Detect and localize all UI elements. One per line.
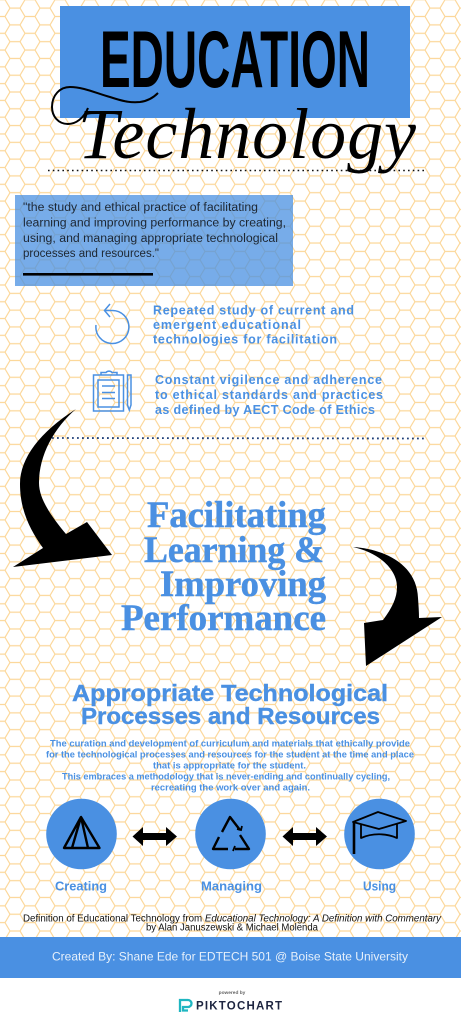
logo mark [180, 1000, 192, 1012]
dotted divider middle [52, 437, 425, 440]
text block: ethical standards: to ethical standards and practices [155, 388, 383, 402]
arrow: double managing to using [282, 827, 327, 846]
powered by Piktochart logo: powered by [219, 990, 246, 996]
paragraph: curation and development: The curation and development of curriculum and materials that ethically provide [50, 738, 410, 750]
heading: facilitating learning and improving performance [121, 495, 326, 639]
arrow: double creating to managing [132, 827, 177, 846]
quote text [23, 202, 286, 260]
heading: facilitating learning and improving performance: Learning & [144, 530, 324, 571]
quote text: "the study and ethical practice of facilitating [23, 202, 258, 214]
heading: appropriate technological processes and resources: Appropriate Technological [72, 680, 388, 706]
footer credit: Created By: Shane Ede for EDTECH 501 @ Boise State University [52, 950, 408, 964]
text block: repeated study: emergent educational [153, 318, 301, 332]
icon: managing recycle [195, 799, 266, 869]
heading: appropriate technological processes and resources [72, 680, 388, 729]
citation text: by Alan Januszewski & Michael Molenda [146, 922, 319, 934]
quote text: processes and resources." [23, 248, 159, 260]
labels: creating managing using: Creating [55, 880, 107, 894]
heading: facilitating learning and improving performance: Improving [160, 564, 326, 605]
arrow: left curved [13, 409, 112, 567]
title banner [60, 6, 410, 118]
labels: creating managing using: Using [363, 880, 396, 894]
paragraph: curation and development: for the technological processes and resources for the student at the time and place [46, 750, 414, 760]
quote underline [23, 273, 153, 276]
text block: repeated study [153, 304, 354, 346]
heading: facilitating learning and improving performance: Facilitating [147, 495, 326, 536]
quote text: learning and improving performance by creating, [23, 218, 286, 230]
powered by Piktochart logo: PIKTOCHART [196, 1000, 282, 1012]
footer band [0, 937, 461, 978]
icon: clipboard and pen [94, 371, 131, 411]
labels: creating managing using: Managing [201, 880, 262, 894]
icon: repeat arrow [96, 304, 129, 343]
arrow: right curved [353, 547, 442, 666]
citation text [23, 914, 442, 934]
paragraph: curation and development: This embraces a methodology that is never-ending and continually cycling, [62, 772, 390, 782]
labels: creating managing using [55, 880, 396, 894]
title: Technology script: Technology [78, 94, 416, 174]
quote text: using, and managing appropriate technological [23, 233, 278, 245]
citation text: Definition of Educational Technology from Educational Technology: A Definition with Commentary [23, 914, 442, 924]
powered by Piktochart logo [180, 990, 282, 1012]
paragraph: curation and development: that is appropriate for the student. [153, 760, 306, 772]
text block: ethical standards [155, 373, 383, 417]
paragraph: curation and development: recreating the work over and again. [151, 782, 310, 794]
icon: creating tent [46, 799, 117, 869]
paragraph: curation and development [46, 738, 414, 794]
text block: ethical standards: as defined by AECT Code of Ethics [155, 403, 375, 417]
text block: repeated study: technologies for facilitation [153, 332, 337, 346]
dotted divider top [48, 170, 425, 172]
text block: repeated study: Repeated study of current and [153, 304, 354, 318]
icon: using graduation cap [344, 799, 415, 869]
text block: ethical standards: Constant vigilence and adherence [155, 373, 382, 387]
panel: definition quote [15, 195, 293, 286]
heading: facilitating learning and improving performance: Performance [121, 598, 326, 639]
heading: appropriate technological processes and resources: Processes and Resources [81, 703, 380, 729]
